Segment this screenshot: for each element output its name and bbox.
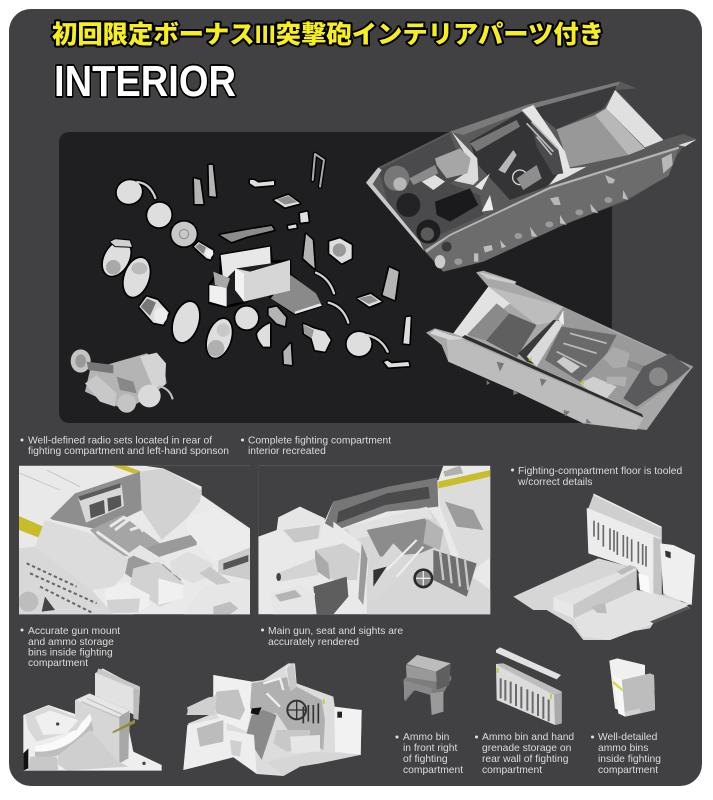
- part: gear cover oval upper: [97, 236, 136, 280]
- part: small cube: [300, 212, 309, 223]
- part: drum: [139, 297, 169, 325]
- part: ribbed disc: [171, 222, 197, 246]
- photo: radio sets close-up: [18, 466, 250, 614]
- part: disc with tail B: [347, 332, 388, 356]
- caption: gun mount: Accurate gun mount: [28, 626, 120, 637]
- illustration: well-detailed ammo bins: [609, 658, 655, 717]
- illustration: ammo bin front right: [403, 655, 452, 715]
- part: small cylinder: [194, 242, 213, 259]
- rear wall: [496, 663, 562, 725]
- part: disc with tail: [113, 177, 155, 207]
- part: gear assembly: [202, 316, 236, 361]
- illustration: ammo bin and grenade storage with lid: [496, 647, 562, 725]
- caption: floor: [511, 466, 683, 488]
- part: plain disc: [143, 198, 176, 232]
- part: bracket small: [283, 343, 292, 365]
- caption: gun mount: and ammo storage: [28, 637, 114, 648]
- caption: well-detailed ammo bins: [591, 732, 661, 776]
- part: half disc: [257, 323, 270, 347]
- caption: well-detailed ammo bins: inside fighting: [598, 754, 661, 765]
- part: strip: [403, 317, 411, 344]
- caption: ammo bin rear wall: [475, 732, 574, 776]
- part: gear cover oval: [119, 255, 154, 300]
- caption: fighting compartment: [241, 436, 391, 457]
- upper hull: interior view: [366, 81, 697, 272]
- part: tall curved plate: [303, 234, 315, 268]
- part: flat plate B: [357, 294, 382, 307]
- illustration: main gun, seat and sights: [183, 663, 362, 776]
- part: tiny clip: [288, 224, 297, 229]
- part: tall plate A: [194, 178, 203, 204]
- part: U frame: [313, 154, 324, 187]
- part: flat plate: [274, 195, 300, 207]
- caption: floor: w/correct details: [517, 477, 592, 488]
- part: round plate: [235, 307, 258, 329]
- caption: main gun: Main gun, seat and sights are: [268, 626, 403, 637]
- caption: radio sets: [20, 436, 229, 457]
- part: long bar: [220, 226, 274, 242]
- dark parts panel: [59, 132, 612, 423]
- part: tall plate B: [209, 165, 216, 197]
- caption: ammo bin rear wall: grenade storage on: [482, 743, 572, 754]
- caption: radio sets: Well-defined radio sets located in rear of: [28, 436, 212, 446]
- parts tree: separated interior parts: [71, 154, 352, 413]
- lower hull: interior view: [426, 271, 693, 430]
- caption: main gun: [261, 626, 403, 648]
- part: engine and transmission assembly: [71, 349, 173, 413]
- caption: gun mount: compartment: [28, 658, 88, 669]
- caption: ammo bin front: Ammo bin: [403, 732, 450, 743]
- part: curved bracket: [303, 324, 331, 352]
- parts near the lower hull: [347, 267, 411, 367]
- part: central compartment assembly: [209, 247, 322, 314]
- heading: INTERIOR: INTERIOR: [54, 57, 236, 106]
- caption: floor: Fighting-compartment floor is tooled: [518, 466, 683, 477]
- caption: well-detailed ammo bins: ammo bins: [598, 743, 648, 754]
- caption: ammo bin front: [396, 732, 463, 776]
- caption: fighting compartment: Complete fighting compartment: [248, 436, 391, 446]
- caption: gun mount: bins inside fighting: [28, 648, 113, 658]
- part: hub: [329, 238, 352, 263]
- caption: fighting compartment: interior recreated: [248, 446, 326, 457]
- caption: ammo bin front: of fighting: [403, 754, 448, 765]
- part: wire A: [316, 273, 334, 293]
- caption: ammo bin rear wall: Ammo bin and hand: [482, 732, 574, 743]
- part: final drive cover: [168, 299, 204, 345]
- caption: ammo bin front: compartment: [403, 765, 463, 776]
- part: small cluster: [269, 307, 286, 326]
- lid: [496, 647, 561, 679]
- caption: ammo bin rear wall: compartment: [482, 765, 542, 776]
- caption: gun mount: [20, 626, 120, 669]
- title: Japanese heading: 初回限定ボーナスIII突撃砲インテリアパーツ付き: [52, 21, 604, 49]
- caption: radio sets: fighting compartment and left-hand sponson: [28, 446, 229, 457]
- caption: well-detailed ammo bins: Well-detailed: [598, 732, 658, 743]
- photo: fighting compartment close-up: [258, 466, 490, 614]
- illustration: fighting-compartment floor with rear wall: [513, 493, 695, 640]
- caption: ammo bin front: in front right: [403, 743, 458, 754]
- caption: ammo bin rear wall: rear wall of fighting: [482, 754, 569, 765]
- illustration: gun mount and ammo bins: [23, 668, 162, 771]
- caption: main gun: accurately rendered: [268, 637, 359, 648]
- part: tall plate C: [383, 267, 399, 300]
- part: curved pipe: [384, 361, 409, 367]
- part: wire B: [329, 303, 348, 323]
- caption: well-detailed ammo bins: compartment: [598, 765, 658, 776]
- part: pipe: [250, 180, 274, 187]
